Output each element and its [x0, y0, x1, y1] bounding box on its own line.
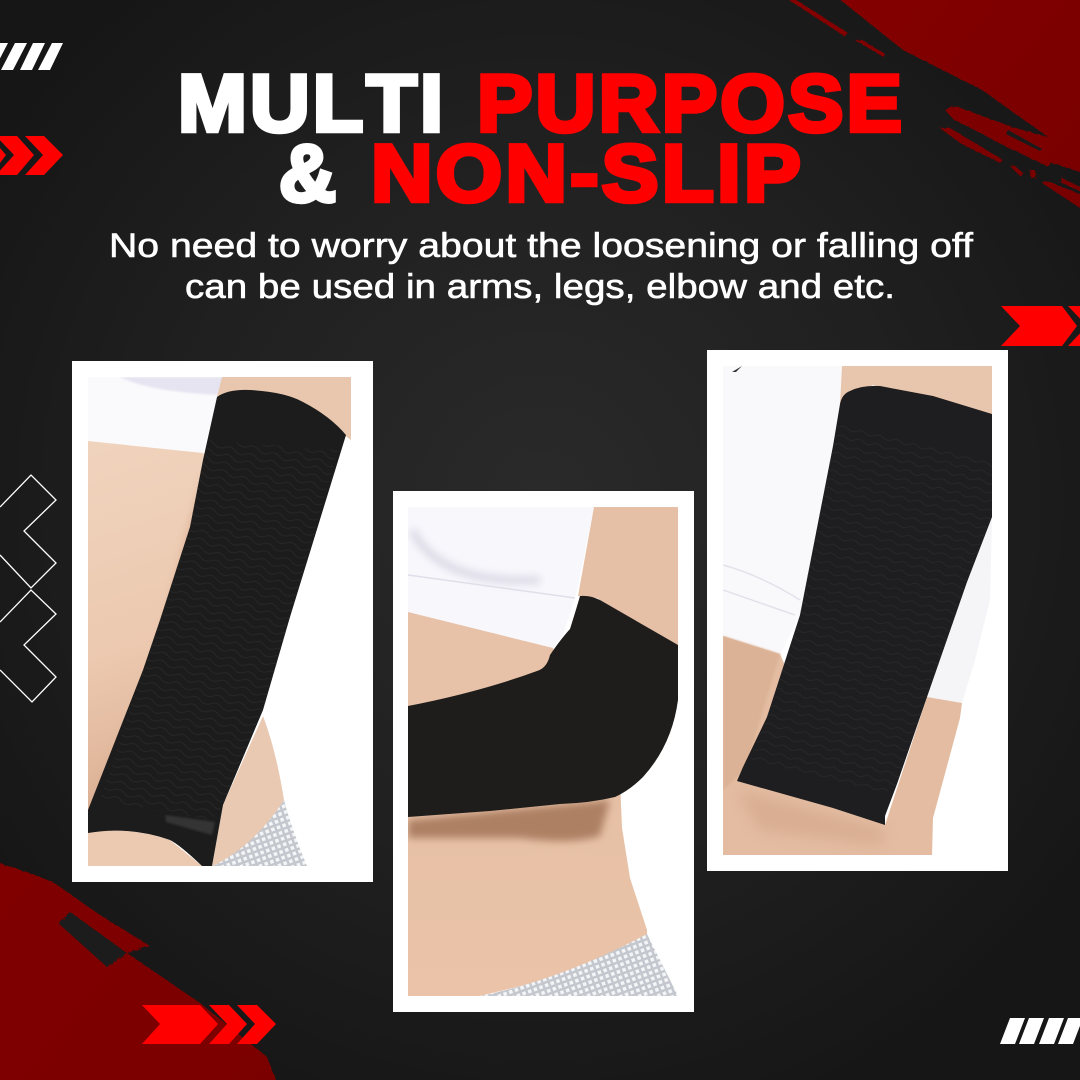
- subtitle: [109, 227, 973, 306]
- subtitle: No need to worry about the loosening or falling off: [109, 227, 973, 265]
- photo panel: arm sleeve straight: [72, 361, 373, 882]
- title: NON-SLIP: [371, 129, 804, 219]
- skin: forearm below sleeve: [88, 831, 202, 866]
- brush notch in bottom red shape: [58, 912, 127, 967]
- sleeve: [737, 386, 992, 825]
- underwear: [213, 800, 307, 866]
- shirt: [723, 366, 842, 654]
- subtitle: can be used in arms, legs, elbow and etc.: [185, 268, 895, 306]
- title: MULTI: [178, 59, 446, 149]
- icon: white stripes top left: [0, 43, 63, 70]
- icon: red chevrons right: [1001, 306, 1080, 346]
- photo panel: upper arm sleeve: [707, 350, 1008, 871]
- red brush stroke: bottom left: [0, 860, 280, 1080]
- skin: upper arm: [217, 377, 351, 440]
- skin: upper arm: [840, 366, 992, 414]
- icon: white stripes bottom right: [1000, 1018, 1080, 1044]
- skin: left body: [88, 441, 204, 833]
- photo panel: elbow sleeve bent: [393, 491, 694, 1012]
- sleeve: [88, 390, 346, 866]
- underwear: [480, 934, 678, 996]
- icon: white zigzag outline left: [0, 475, 56, 702]
- title: PURPOSE: [477, 59, 905, 149]
- skin: waist: [212, 716, 288, 866]
- skin: upper arm: [578, 507, 678, 648]
- title: [178, 59, 905, 219]
- red brush stroke: top right: [780, 0, 1080, 212]
- shirt: [408, 507, 594, 648]
- sleeve: [408, 596, 678, 817]
- icon: red chevrons top left: [0, 136, 63, 175]
- brush slit in top red shape: [1006, 130, 1042, 151]
- title: &: [279, 129, 339, 219]
- skin: left and bottom: [723, 636, 962, 855]
- sleeve shadow: [408, 800, 610, 841]
- shirt: [88, 377, 224, 453]
- icon: red chevrons bottom: [142, 1005, 276, 1044]
- skin: body: [408, 612, 554, 706]
